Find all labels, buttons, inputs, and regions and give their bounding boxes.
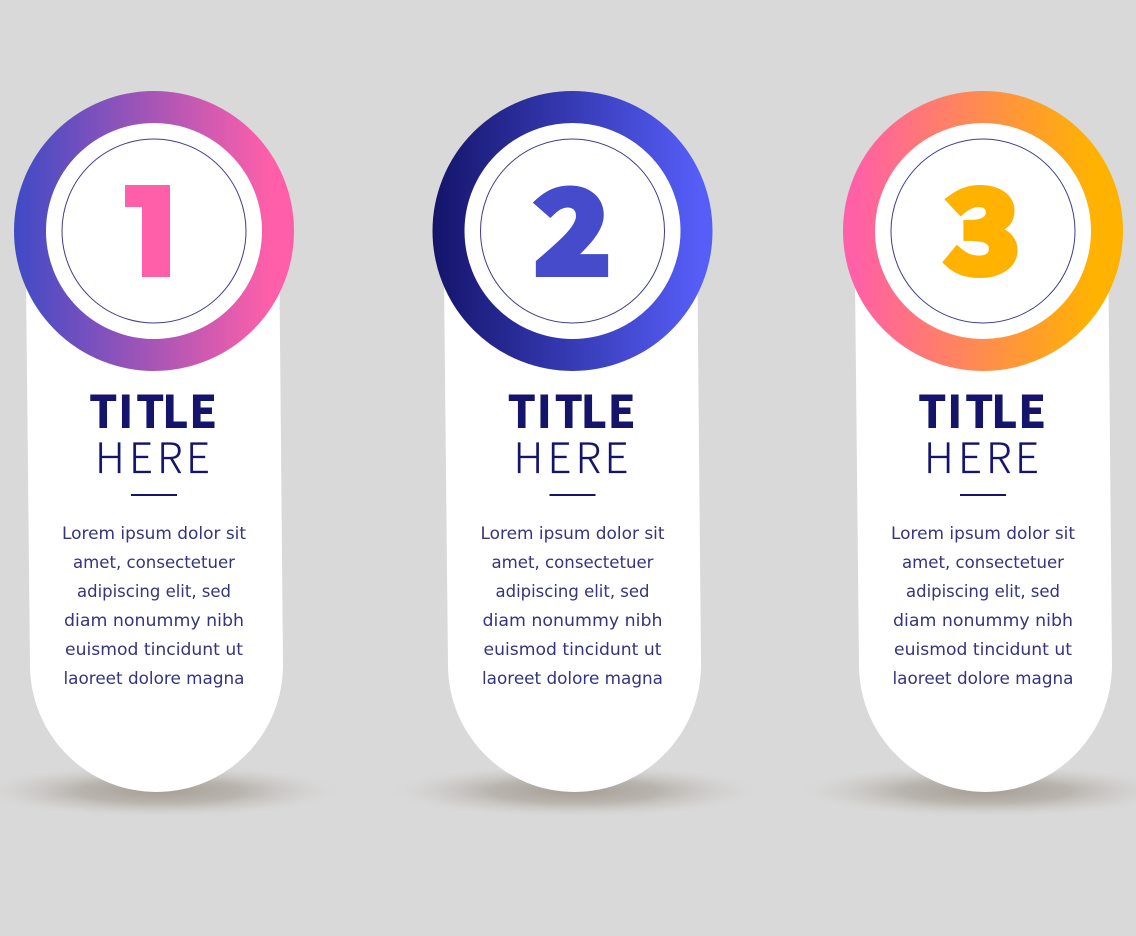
body text 3: laoreet dolore magna xyxy=(892,669,1074,688)
body text 3: adipiscing elit, sed xyxy=(906,582,1060,601)
subtitle 1: HERE xyxy=(95,425,210,486)
body text 2: diam nonummy nibh xyxy=(482,611,662,630)
body text 1: diam nonummy nibh xyxy=(64,611,244,630)
body text 2: euismod tincidunt ut xyxy=(484,640,662,659)
body text 1 xyxy=(62,524,247,688)
body text 2: amet, consectetuer xyxy=(492,553,654,572)
shadow under card 1 xyxy=(0,764,345,818)
body text 3 xyxy=(891,524,1076,688)
shadow under card 2 xyxy=(385,764,765,818)
divider 3 xyxy=(960,494,1006,496)
number ring 3 xyxy=(859,107,1107,355)
number 1: 1 xyxy=(119,137,189,309)
panel: step 3 xyxy=(795,107,1136,818)
card body 2 xyxy=(444,230,701,792)
card body 1 xyxy=(26,230,283,792)
body text 2: adipiscing elit, sed xyxy=(496,582,650,601)
body text 3: euismod tincidunt ut xyxy=(894,640,1073,659)
body text 2: Lorem ipsum dolor sit xyxy=(480,524,665,543)
thin inner circle 3 xyxy=(891,139,1075,323)
body text 1: Lorem ipsum dolor sit xyxy=(62,524,247,543)
card body 3 xyxy=(854,230,1112,792)
body text 1: adipiscing elit, sed xyxy=(77,582,231,601)
title 3: TITLE xyxy=(918,376,1046,440)
body text 2 xyxy=(480,524,665,688)
body text 1: euismod tincidunt ut xyxy=(65,640,244,659)
body text 2: laoreet dolore magna xyxy=(482,669,663,688)
divider 1 xyxy=(131,494,177,496)
number 3: 3 xyxy=(946,143,1020,305)
title 1: TITLE xyxy=(90,376,217,440)
shadow under card 3 xyxy=(795,764,1136,818)
body text 3: Lorem ipsum dolor sit xyxy=(891,524,1076,543)
number ring 2 xyxy=(448,107,696,355)
panel: step 2 xyxy=(385,107,765,818)
panel: step 1 xyxy=(14,91,306,812)
infographic canvas xyxy=(14,91,1136,812)
body text 3: amet, consectetuer xyxy=(902,553,1064,572)
body text 1: laoreet dolore magna xyxy=(64,669,244,688)
thin inner circle 1 xyxy=(62,139,246,323)
number ring 1 xyxy=(30,107,278,355)
subtitle 3: HERE xyxy=(924,425,1039,486)
subtitle 2: HERE xyxy=(514,425,629,486)
title 2: TITLE xyxy=(508,376,635,440)
divider 2 xyxy=(550,494,596,496)
body text 3: diam nonummy nibh xyxy=(893,611,1073,630)
thin inner circle 2 xyxy=(480,139,664,323)
number 2: 2 xyxy=(536,144,610,306)
body text 1: amet, consectetuer xyxy=(73,553,235,572)
